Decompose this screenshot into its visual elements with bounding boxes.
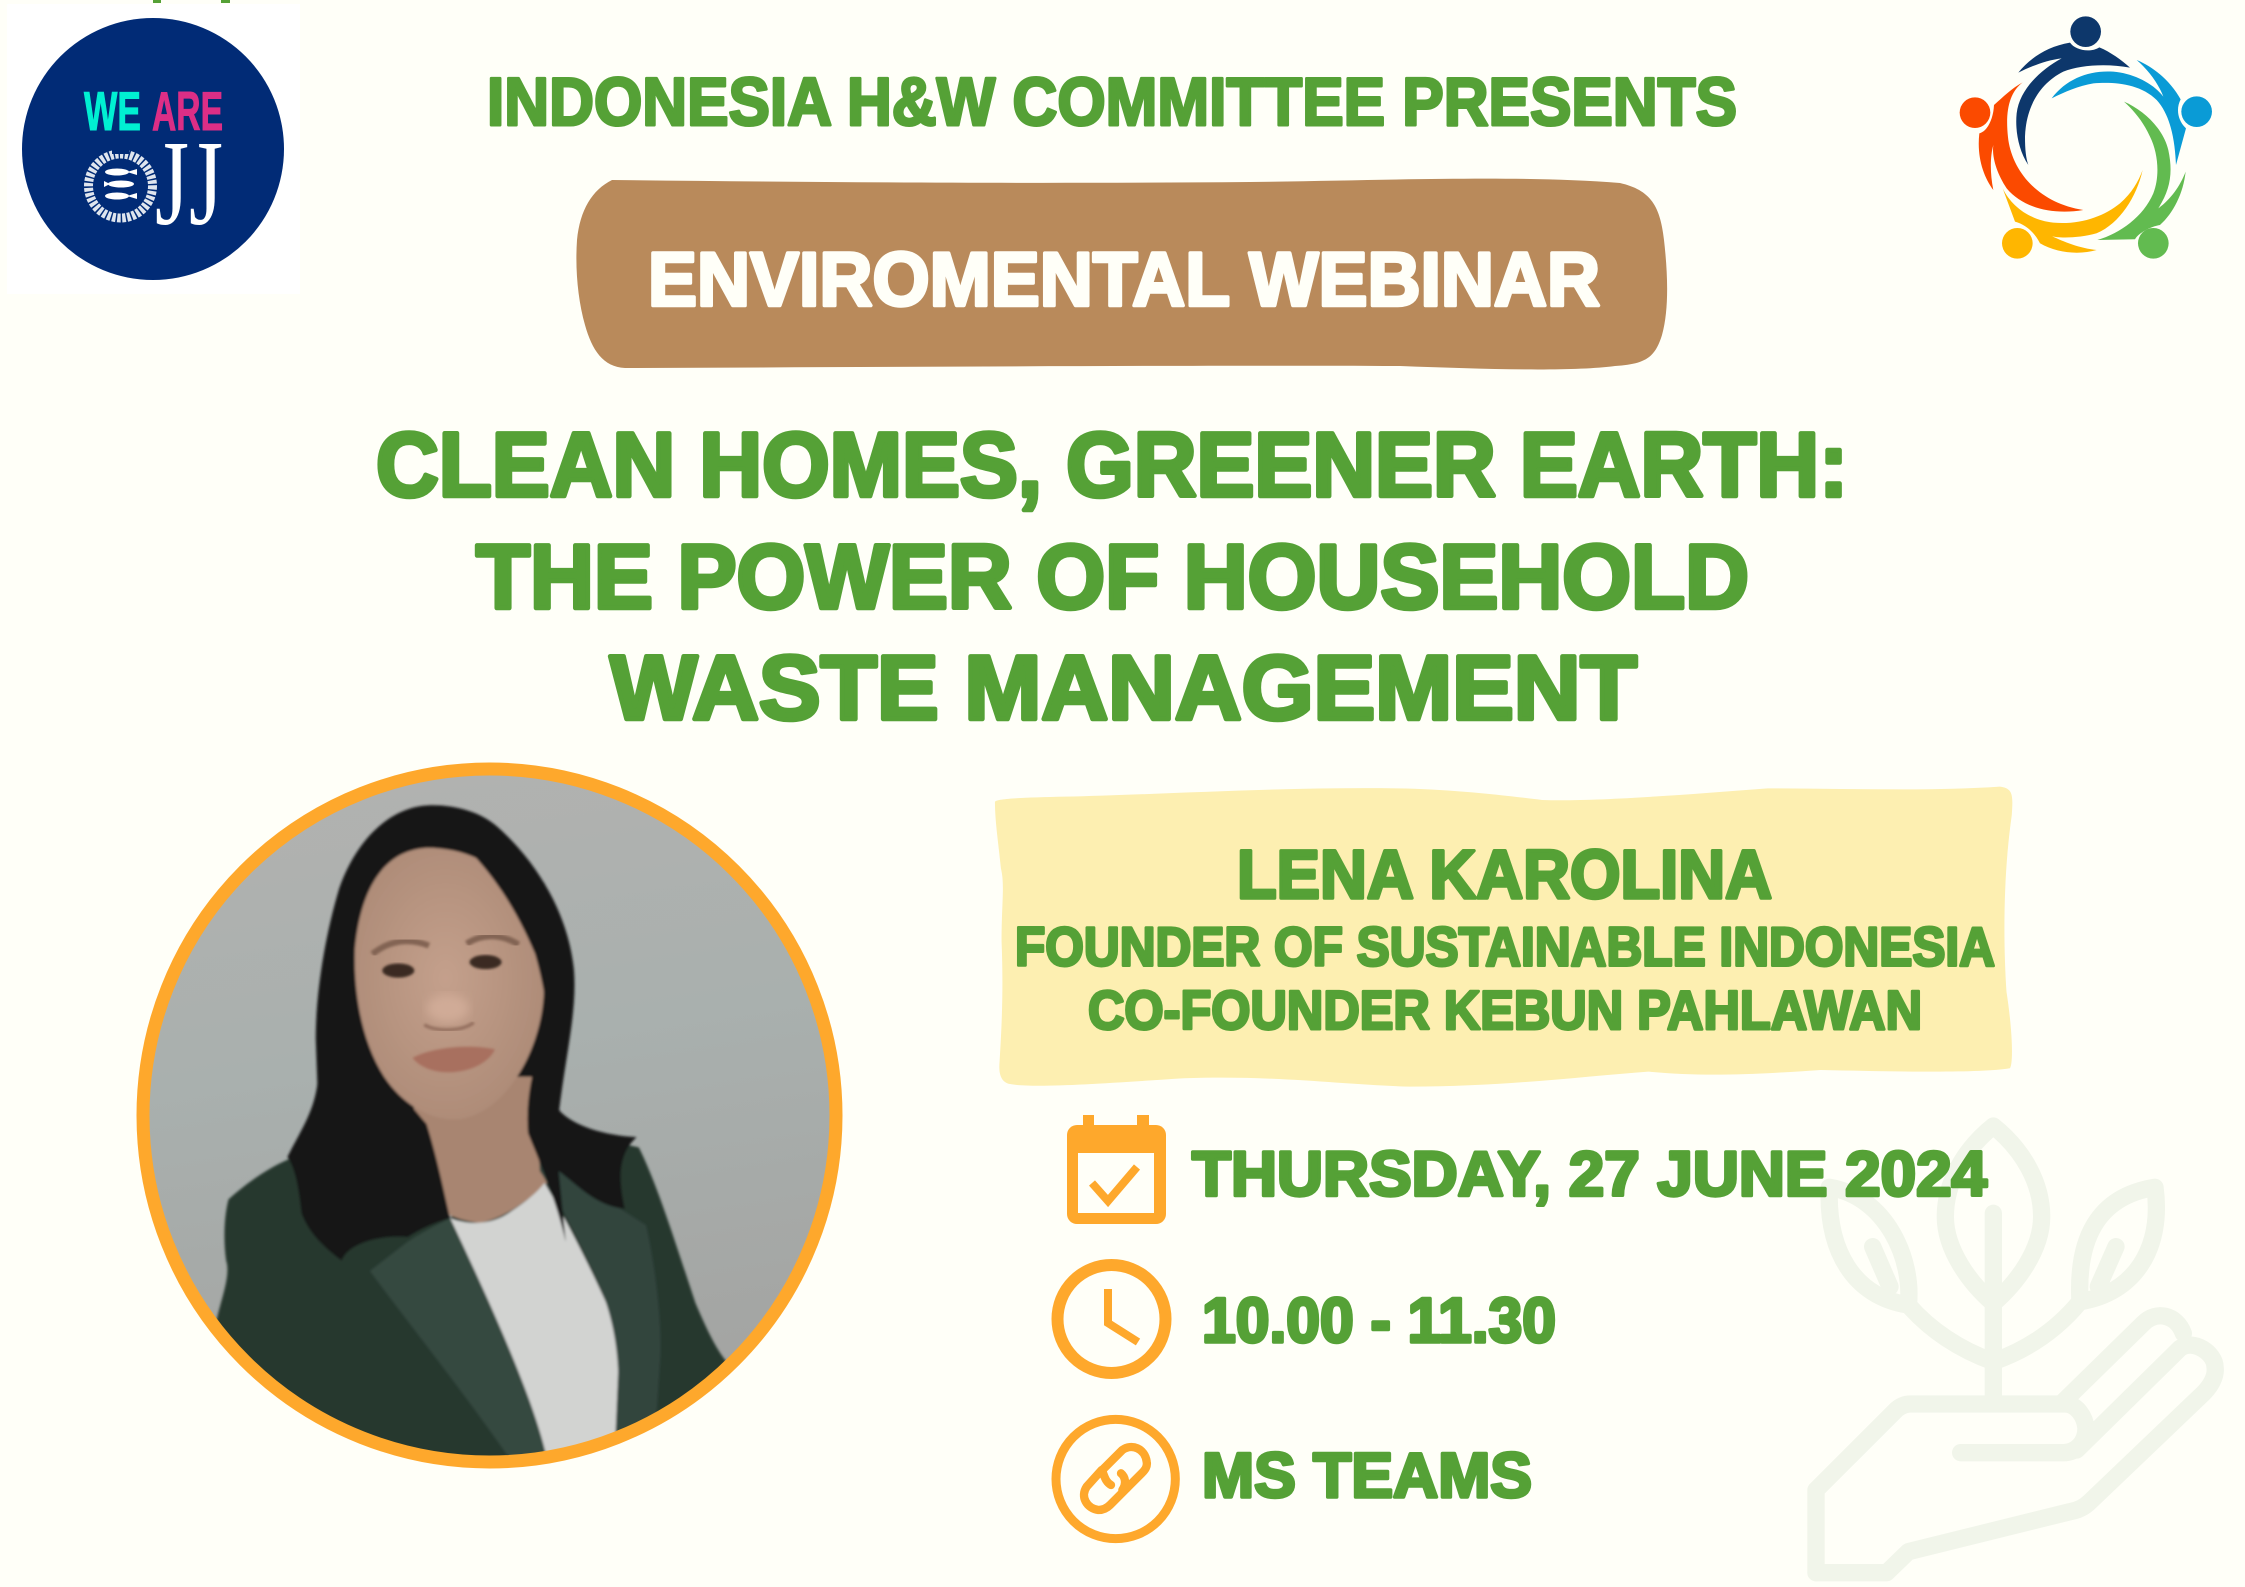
right hair strands bbox=[527, 902, 637, 1242]
icon: calendar bbox=[1067, 1115, 1166, 1224]
lapels bbox=[370, 1218, 547, 1461]
logo: We Are JJ: JJ bbox=[155, 116, 223, 251]
heading: presenter line: INDONESIA H&W COMMITTEE PRESENTS bbox=[487, 64, 1737, 140]
platform: MS TEAMS bbox=[1202, 1441, 1532, 1511]
speaker role 2: CO-FOUNDER KEBUN PAHLAWAN bbox=[1088, 979, 1922, 1041]
logo: We Are JJ: WE bbox=[84, 80, 141, 142]
hair behind head bbox=[316, 805, 575, 1114]
title: three lines: THE POWER OF HOUSEHOLD bbox=[476, 527, 1749, 628]
title: three lines bbox=[376, 415, 1848, 739]
logo: We Are JJ: ARE bbox=[152, 80, 223, 142]
icon: link bbox=[1056, 1419, 1175, 1539]
crest: wreath and fish bbox=[88, 146, 152, 218]
logo: five people circle bbox=[1960, 16, 2212, 259]
facial features bbox=[372, 936, 519, 1072]
date: THURSDAY, 27 JUNE 2024 bbox=[1192, 1140, 1987, 1210]
speaker photo in orange ring bbox=[130, 760, 850, 1511]
speaker name: LENA KAROLINA bbox=[1237, 836, 1772, 913]
title: three lines: CLEAN HOMES, GREENER EARTH: bbox=[376, 415, 1848, 516]
shirt bbox=[450, 1183, 618, 1459]
title: three lines: WASTE MANAGEMENT bbox=[610, 638, 1637, 739]
banner: webinar label: ENVIROMENTAL WEBINAR bbox=[648, 238, 1600, 322]
face bbox=[355, 848, 544, 1119]
time: 10.00 - 11.30 bbox=[1202, 1286, 1556, 1356]
watermark icon: hand holding plant bbox=[1816, 1126, 2215, 1573]
banner: webinar label bbox=[576, 179, 1667, 369]
left hair strands bbox=[286, 1084, 452, 1260]
speaker card bbox=[995, 787, 2012, 1087]
neck bbox=[403, 1077, 547, 1223]
logo: We Are JJ bbox=[7, 0, 300, 294]
jacket bbox=[210, 1124, 733, 1511]
icon: clock bbox=[1058, 1265, 1166, 1373]
speaker role 1: FOUNDER OF SUSTAINABLE INDONESIA bbox=[1015, 916, 1995, 978]
